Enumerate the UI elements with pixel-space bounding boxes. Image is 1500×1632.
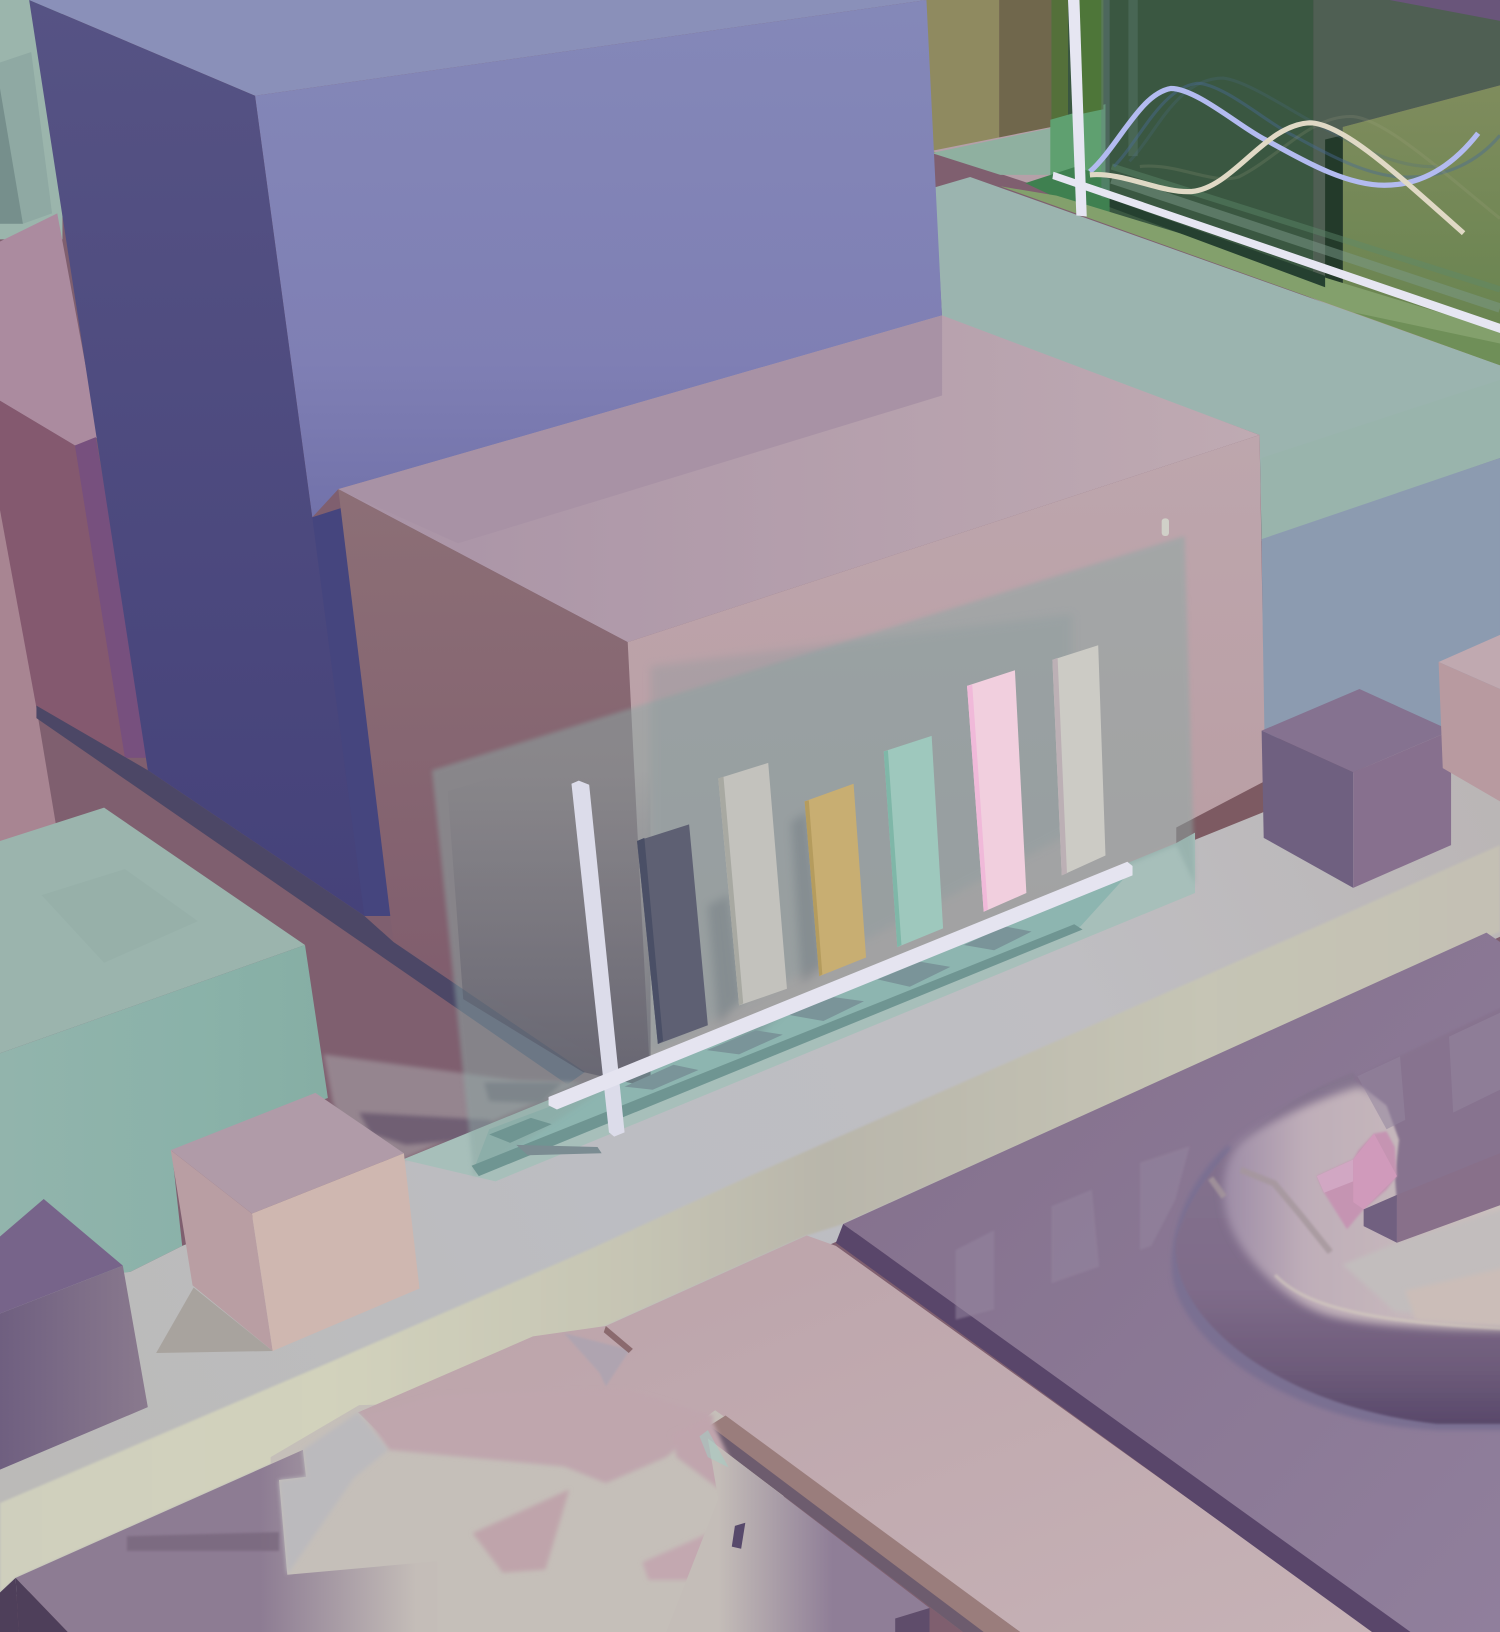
panel: mint block left bbox=[0, 808, 328, 1291]
pink building front face bbox=[628, 435, 1266, 1088]
series: blue bbox=[1090, 88, 1478, 185]
panel: beige road strip bbox=[0, 845, 1500, 1592]
bar: light grey bbox=[1052, 645, 1105, 875]
torus tube bbox=[1176, 1072, 1500, 1424]
panel: blurred bottom area bbox=[0, 1412, 930, 1632]
series: cream bbox=[1090, 123, 1464, 233]
panel: bar chart bbox=[472, 645, 1133, 1176]
panel: glass chart pane bbox=[432, 518, 1195, 1176]
panel: line chart bbox=[1052, 0, 1500, 333]
bar soft shadows bbox=[708, 812, 822, 1041]
backdrop: echo curves bbox=[1114, 83, 1500, 177]
bar: slate bbox=[637, 824, 708, 1044]
panel: distant olive block bbox=[924, 0, 1500, 375]
panel: line chart glass backdrop bbox=[1000, 0, 1500, 365]
bar shadows on floor bbox=[625, 926, 1032, 1090]
backdrop: dark green wall bbox=[1068, 0, 1314, 291]
plate shadow pattern bbox=[956, 1146, 1190, 1320]
backdrop: green patch by origin bbox=[1025, 167, 1110, 213]
bar: grey bbox=[718, 763, 787, 1005]
icon: rose cube far right bbox=[1439, 635, 1500, 801]
line chart y axis bbox=[1068, 0, 1087, 216]
grey patch bbox=[279, 1412, 388, 1575]
tower front face bbox=[255, 0, 942, 517]
rose slivers bbox=[473, 1489, 569, 1573]
icon: purple cube right bbox=[1262, 689, 1451, 888]
torus inner light bbox=[1223, 1087, 1500, 1330]
backdrop: dark stripe bbox=[1325, 135, 1343, 295]
line chart x axis bbox=[1052, 172, 1500, 333]
plate top bbox=[843, 933, 1500, 1632]
panel: pink building bbox=[338, 315, 1266, 1088]
panel: rose slab bbox=[358, 1235, 1374, 1632]
y axis bbox=[571, 781, 625, 1137]
tower top face bbox=[29, 0, 926, 96]
pink building left face bbox=[338, 489, 651, 1088]
backdrop: glass floor stripes bbox=[1112, 179, 1500, 308]
torus cast shadow bbox=[1172, 1145, 1500, 1430]
backdrop: faint glass bars bbox=[1101, 0, 1110, 198]
bar: pink bbox=[967, 670, 1026, 912]
pink building top face bbox=[338, 315, 1260, 642]
panel: shadows on pavement bbox=[324, 1054, 583, 1159]
icon: purple cube bottom left bbox=[0, 1199, 148, 1470]
panel: left pink building bbox=[0, 213, 151, 843]
bar: teal bbox=[884, 736, 943, 947]
plate rim bbox=[836, 1224, 1410, 1632]
panel: blue tower bbox=[29, 0, 942, 916]
pink blocks bbox=[1317, 1131, 1397, 1229]
torus seam highlight bbox=[1275, 1275, 1500, 1330]
panel: purple plate with torus bbox=[836, 933, 1500, 1632]
pane corner pip bbox=[1162, 518, 1169, 536]
x axis bbox=[549, 862, 1133, 1110]
backdrop: olive floor bbox=[1000, 186, 1500, 365]
backdrop: olive block bbox=[1343, 85, 1500, 338]
slab soft lower edge bbox=[364, 1389, 715, 1483]
torus centre light bbox=[1343, 1197, 1500, 1322]
panel: beige underlay bottom bbox=[271, 1395, 802, 1632]
left plate bbox=[16, 1450, 437, 1632]
bar: gold bbox=[805, 784, 866, 976]
backdrop: grey wall bbox=[1314, 0, 1500, 297]
axis shadow on floor bbox=[472, 924, 1083, 1176]
right plate bbox=[666, 1438, 930, 1632]
purple block bbox=[1364, 1195, 1397, 1243]
icon: rose cube left bbox=[156, 1093, 420, 1353]
slab notch bbox=[564, 1333, 630, 1386]
panel: teal mid block bbox=[935, 177, 1500, 739]
plate overlap beyond ring bbox=[1353, 989, 1500, 1203]
panel: sidewalk bbox=[0, 708, 1500, 1603]
torus stripe bbox=[1211, 1170, 1330, 1252]
panel: road trench shadow bbox=[36, 706, 585, 1085]
slab brown rim bbox=[700, 1416, 1020, 1632]
panel: background teal block top left bbox=[0, 0, 62, 239]
tower left face bbox=[29, 0, 390, 916]
torus ring bbox=[1172, 989, 1500, 1430]
panel: glass floor bbox=[403, 833, 1195, 1181]
